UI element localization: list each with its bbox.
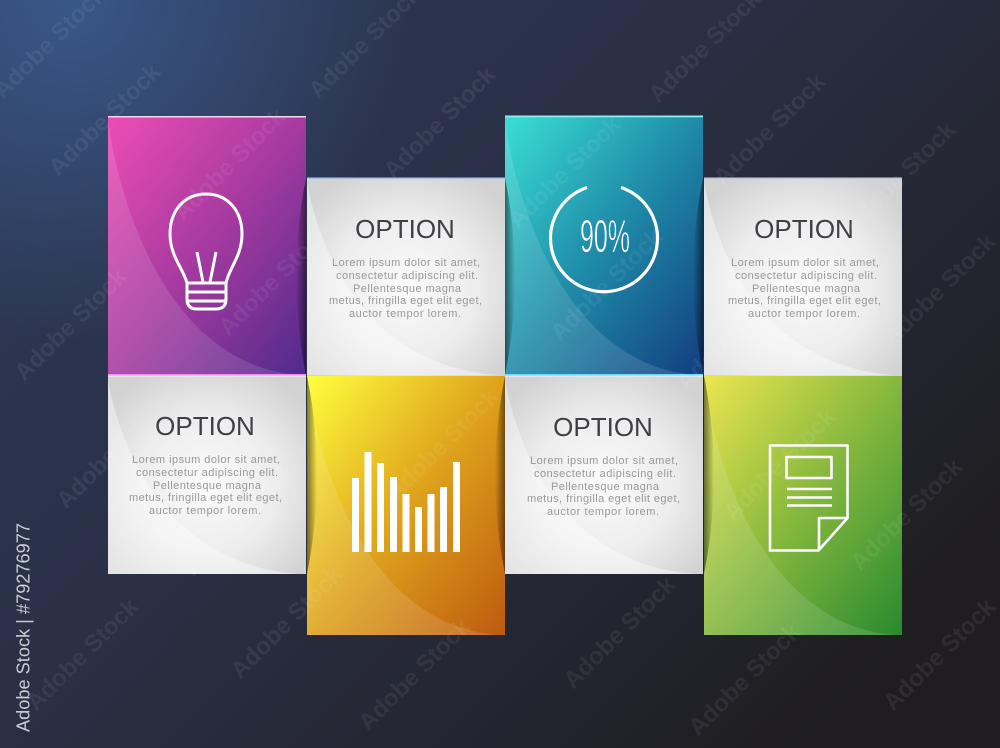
icon: light bulb <box>170 194 242 309</box>
watermarks: Adobe Stock <box>683 618 807 741</box>
number: 90%: 90% <box>580 210 630 262</box>
body text <box>527 455 680 518</box>
body text: metus, fringilla eget elit eget, <box>728 295 881 307</box>
watermarks: Adobe Stock <box>338 268 462 391</box>
watermarks: Adobe Stock <box>503 111 627 234</box>
watermarks: Adobe Stock <box>545 223 669 346</box>
watermarks: Adobe Stock <box>353 613 477 736</box>
body text: Lorem ipsum dolor sit amet, <box>332 257 480 269</box>
watermarks: Adobe Stock <box>845 453 969 576</box>
body text: auctor tempor lorem. <box>547 506 659 518</box>
body text: metus, fringilla eget elit eget, <box>129 492 282 504</box>
watermarks: Adobe Stock <box>878 228 1000 351</box>
watermarks: Adobe Stock <box>718 403 842 526</box>
watermarks: Adobe Stock <box>378 61 502 184</box>
credit: stock id: Adobe Stock | #79276977 <box>14 523 34 732</box>
chart: bars <box>352 452 460 552</box>
body text: Pellentesque magna <box>551 481 660 493</box>
body text: consectetur adipiscing elit. <box>136 467 278 479</box>
body text <box>329 257 482 320</box>
body text: Pellentesque magna <box>153 480 262 492</box>
body text: consectetur adipiscing elit. <box>534 468 676 480</box>
heading: OPTION <box>754 214 854 244</box>
body text: consectetur adipiscing elit. <box>735 270 877 282</box>
body text: auctor tempor lorem. <box>149 505 261 517</box>
watermarks: Adobe Stock <box>213 218 337 341</box>
heading: OPTION <box>553 412 653 442</box>
watermarks: Adobe Stock <box>51 391 175 514</box>
heading: OPTION <box>355 214 455 244</box>
panel: teal percent card <box>505 116 703 376</box>
body text: metus, fringilla eget elit eget, <box>329 295 482 307</box>
panel: option card top 2 <box>704 178 902 376</box>
watermarks: Adobe Stock <box>508 448 632 571</box>
panel: green document card <box>704 376 902 635</box>
body text <box>129 454 282 517</box>
body text: Lorem ipsum dolor sit amet, <box>731 257 879 269</box>
heading: OPTION <box>155 411 255 441</box>
body text: Pellentesque magna <box>752 283 861 295</box>
body text: metus, fringilla eget elit eget, <box>527 493 680 505</box>
icon: document <box>770 446 848 550</box>
watermarks: Adobe Stock <box>225 561 349 684</box>
body text: Lorem ipsum dolor sit amet, <box>132 454 280 466</box>
body text: Lorem ipsum dolor sit amet, <box>530 455 678 467</box>
watermarks: Adobe Stock <box>43 58 167 181</box>
panel: option card bottom 2 <box>505 376 703 574</box>
panel: option card bottom 1 <box>108 376 306 574</box>
watermarks: Adobe Stock <box>178 458 302 581</box>
watermarks: Adobe Stock <box>21 593 145 716</box>
watermarks: Adobe Stock <box>558 571 682 694</box>
watermarks: Adobe Stock <box>671 273 795 396</box>
panel: yellow chart card <box>307 376 505 635</box>
chart: 90 percent ring <box>550 188 657 292</box>
watermarks: Adobe Stock <box>708 68 832 191</box>
watermarks: Adobe Stock <box>9 263 133 386</box>
body text <box>728 257 881 320</box>
watermarks: Adobe Stock <box>381 383 505 506</box>
panel: purple bulb card <box>108 116 306 376</box>
watermarks: Adobe Stock <box>878 593 1000 716</box>
body text: auctor tempor lorem. <box>748 308 860 320</box>
watermarks: Adobe Stock <box>168 103 292 226</box>
body text: auctor tempor lorem. <box>349 308 461 320</box>
body text: consectetur adipiscing elit. <box>336 270 478 282</box>
watermarks: Adobe Stock <box>838 116 962 239</box>
panel: option card top 1 <box>307 178 505 376</box>
body text: Pellentesque magna <box>353 283 462 295</box>
